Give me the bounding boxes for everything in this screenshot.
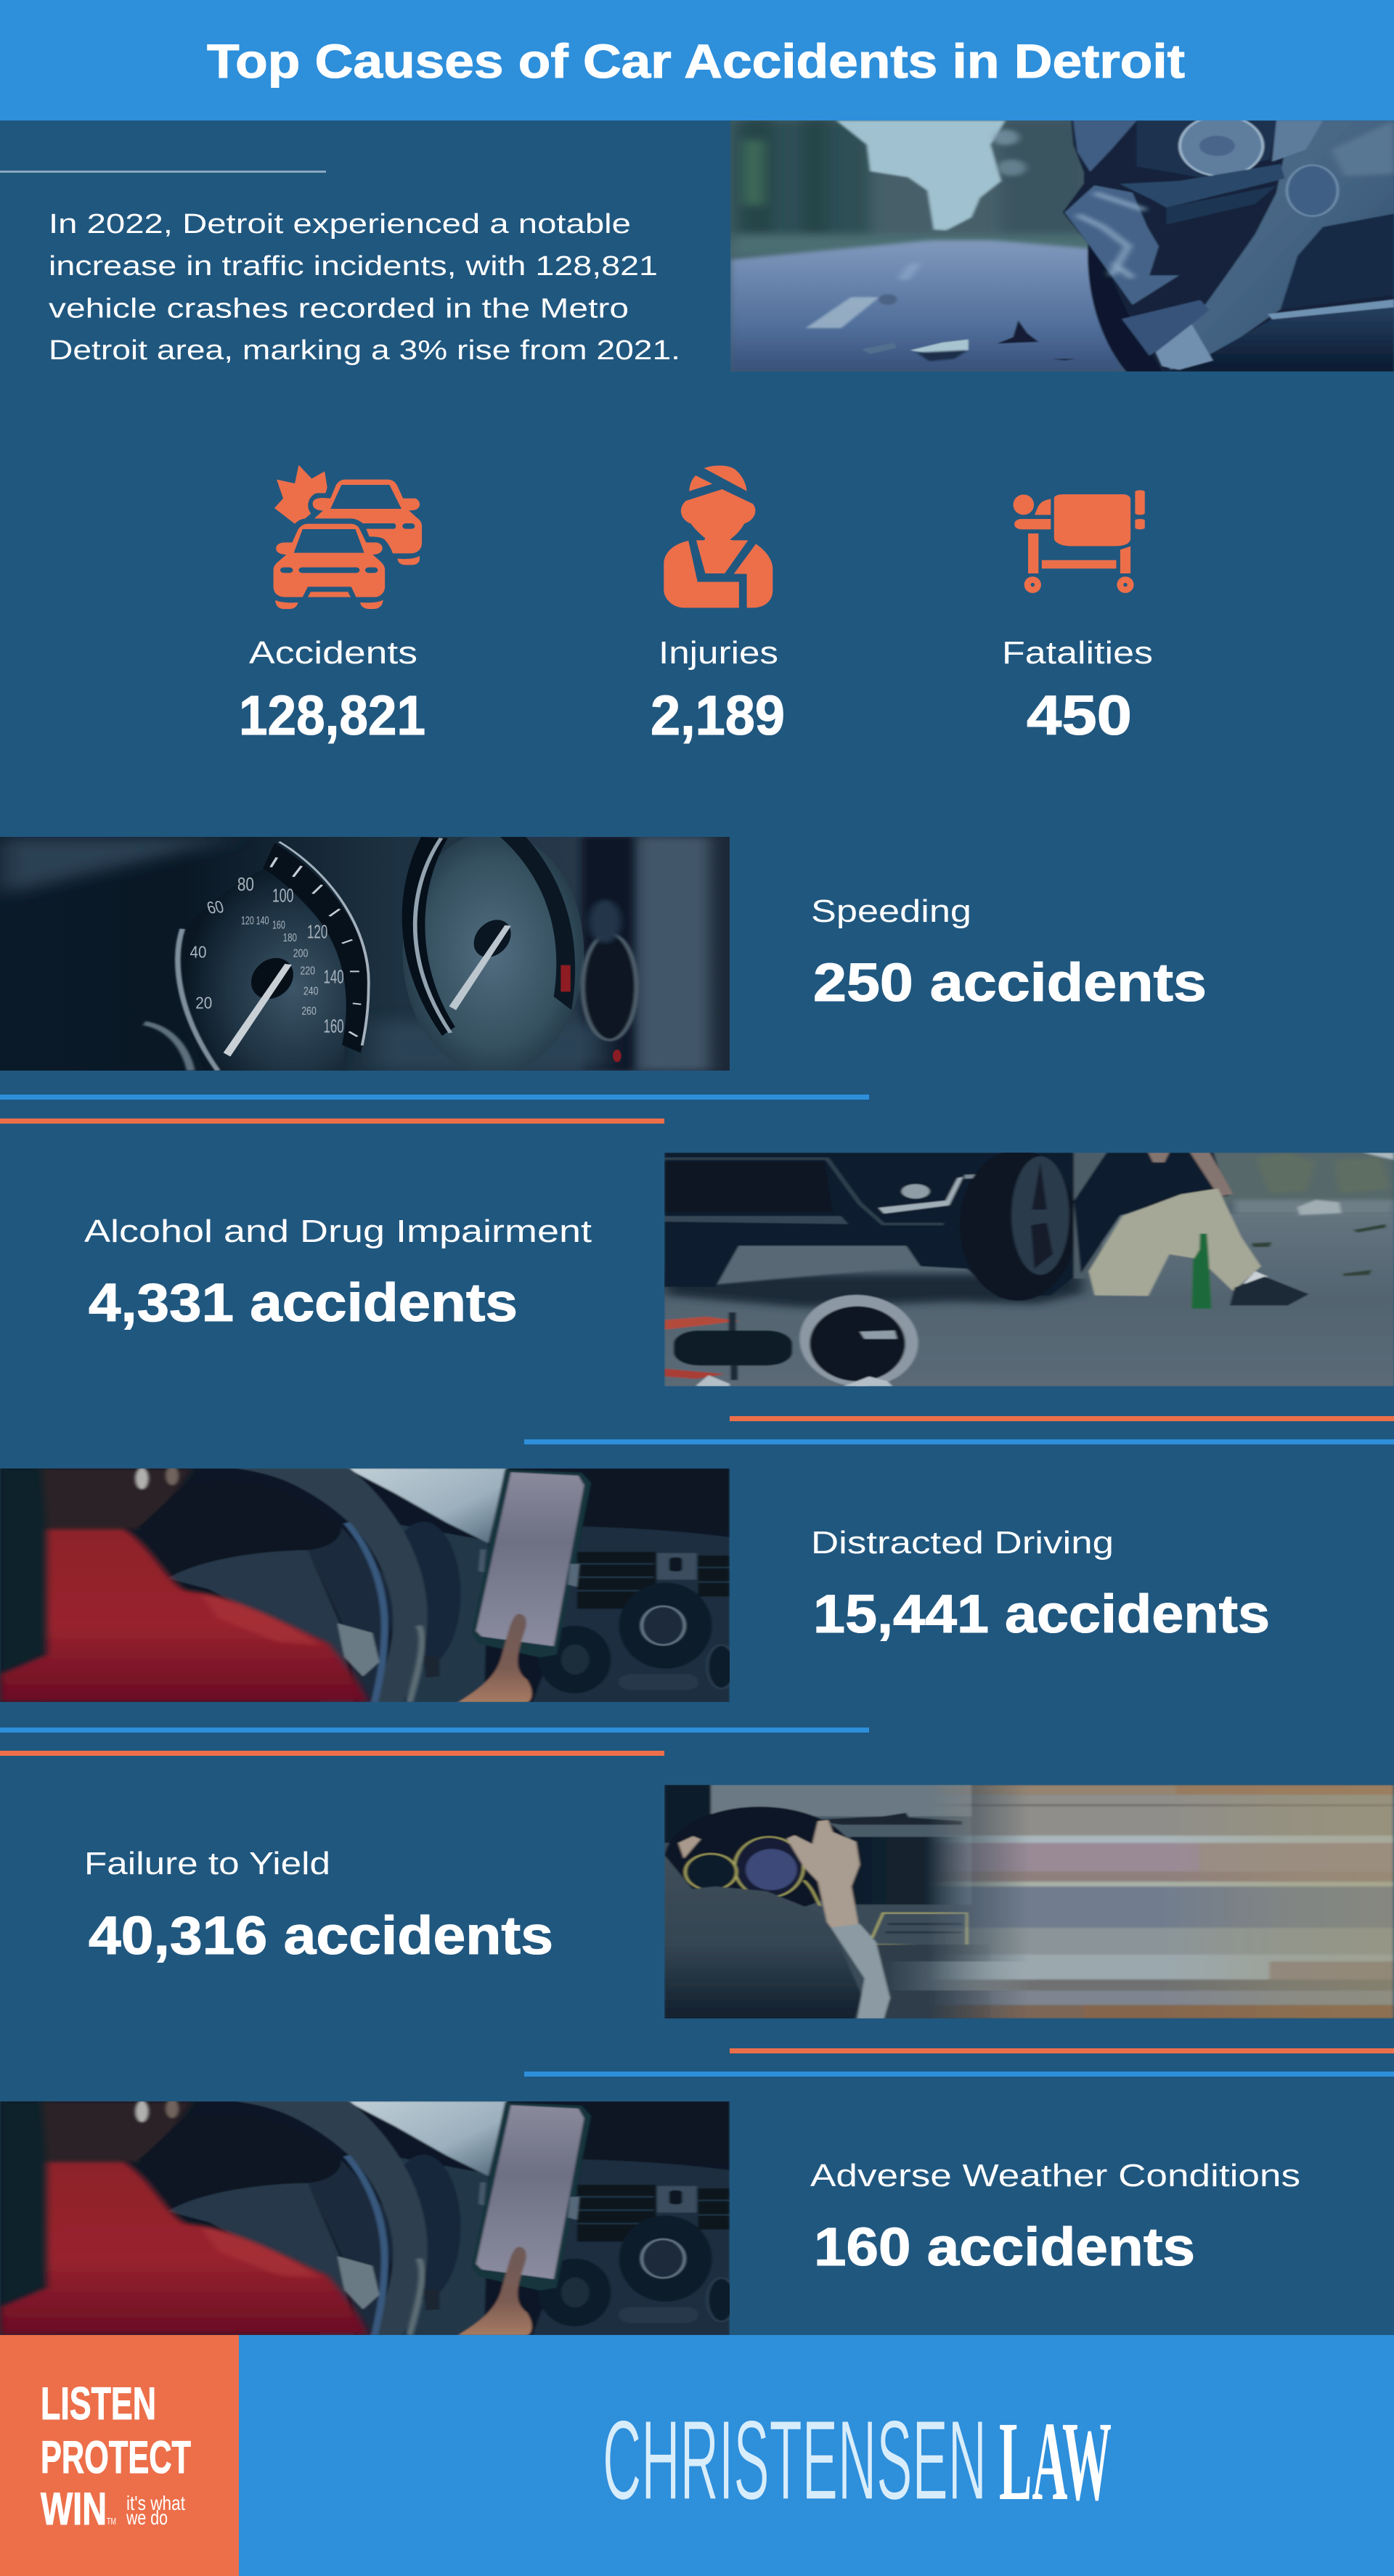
photo: speedometer: 200 [293, 947, 308, 960]
footer [0, 2335, 1394, 2576]
stat: accidents label: Accidents [249, 635, 417, 671]
stat: fatalities label: Fatalities [1002, 635, 1153, 671]
slogan block: we do [126, 2506, 168, 2529]
photo: speedometer: 160 [323, 1015, 344, 1036]
panel: failure to yield [84, 1785, 1394, 2019]
slogan block: PROTECT [41, 2432, 191, 2483]
photo: speedometer: 80 [237, 874, 254, 895]
cause label: Speeding [811, 894, 971, 929]
slogan block: WIN [41, 2484, 107, 2535]
intro text: increase in traffic incidents, with 128,821 [49, 251, 658, 282]
photo: speedometer: 260 [301, 1005, 317, 1018]
photo: driver with motion blur [664, 1785, 1394, 2019]
stat: injuries value: 2,189 [651, 684, 785, 747]
stat: fatalities value: 450 [1027, 684, 1132, 747]
accident count: 15,441 accidents [813, 1584, 1270, 1644]
logo: Christensen Law: CHRISTENSEN [603, 2397, 987, 2524]
cause label: Distracted Driving [811, 1525, 1114, 1561]
footer: LAW [999, 2398, 1112, 2524]
panel: distracted driving [0, 1466, 1270, 1702]
photo: speedometer: 140 [323, 967, 344, 988]
cause label: Failure to Yield [84, 1846, 330, 1881]
photo: speedometer: 160 [272, 919, 285, 932]
photo: speedometer: 180 [283, 931, 297, 944]
slogan block: it's what [126, 2492, 185, 2514]
photo: speedometer: 60 [205, 897, 226, 917]
accident count: 4,331 accidents [89, 1272, 518, 1333]
slogan block: TM [107, 2516, 116, 2527]
intro text: In 2022, Detroit experienced a notable [49, 209, 631, 240]
intro text: vehicle crashes recorded in the Metro [49, 293, 629, 324]
title: Top Causes of Car Accidents in Detroit [207, 34, 1185, 88]
photo: speedometer: 240 [303, 985, 318, 997]
slogan block: LISTEN [41, 2379, 156, 2429]
photo: crashed car on road [730, 115, 1394, 372]
icon: car crash [274, 465, 422, 609]
photo: phone while driving (repeat) [0, 2099, 735, 2335]
photo: speedometer: 120 [307, 921, 327, 942]
slogan block [0, 2335, 239, 2576]
logo: Christensen Law [603, 2397, 1112, 2524]
stats panel [239, 465, 1153, 747]
intro text: Detroit area, marking a 3% rise from 2021. [49, 335, 680, 366]
photo: speedometer: 220 [300, 965, 315, 977]
photo: speedometer: 40 [190, 943, 207, 962]
stat: accidents value: 128,821 [239, 684, 425, 747]
photo: speedometer [0, 832, 730, 1074]
photo: phone while driving [0, 1466, 735, 1702]
photo: speedometer: 120 140 [241, 915, 269, 928]
icon: stretcher [1014, 490, 1145, 593]
cause label: Adverse Weather Conditions [810, 2158, 1300, 2193]
icon: injured person [664, 465, 773, 608]
accident count: 40,316 accidents [89, 1905, 553, 1966]
panel: adverse weather conditions [0, 2099, 1300, 2335]
photo: speedometer: 20 [195, 994, 212, 1013]
panel: alcohol and drug impairment [84, 1150, 1394, 1389]
accident count: 160 accidents [814, 2217, 1195, 2277]
intro text [49, 209, 680, 366]
photo: person beside car with bottle [664, 1150, 1394, 1389]
cause label: Alcohol and Drug Impairment [84, 1214, 592, 1249]
stat: injuries label: Injuries [659, 635, 778, 671]
intro panel [0, 171, 680, 366]
photo: speedometer: 100 [272, 885, 293, 906]
accident count: 250 accidents [813, 952, 1207, 1013]
title banner [0, 0, 1394, 120]
panel: speeding [0, 832, 1207, 1074]
